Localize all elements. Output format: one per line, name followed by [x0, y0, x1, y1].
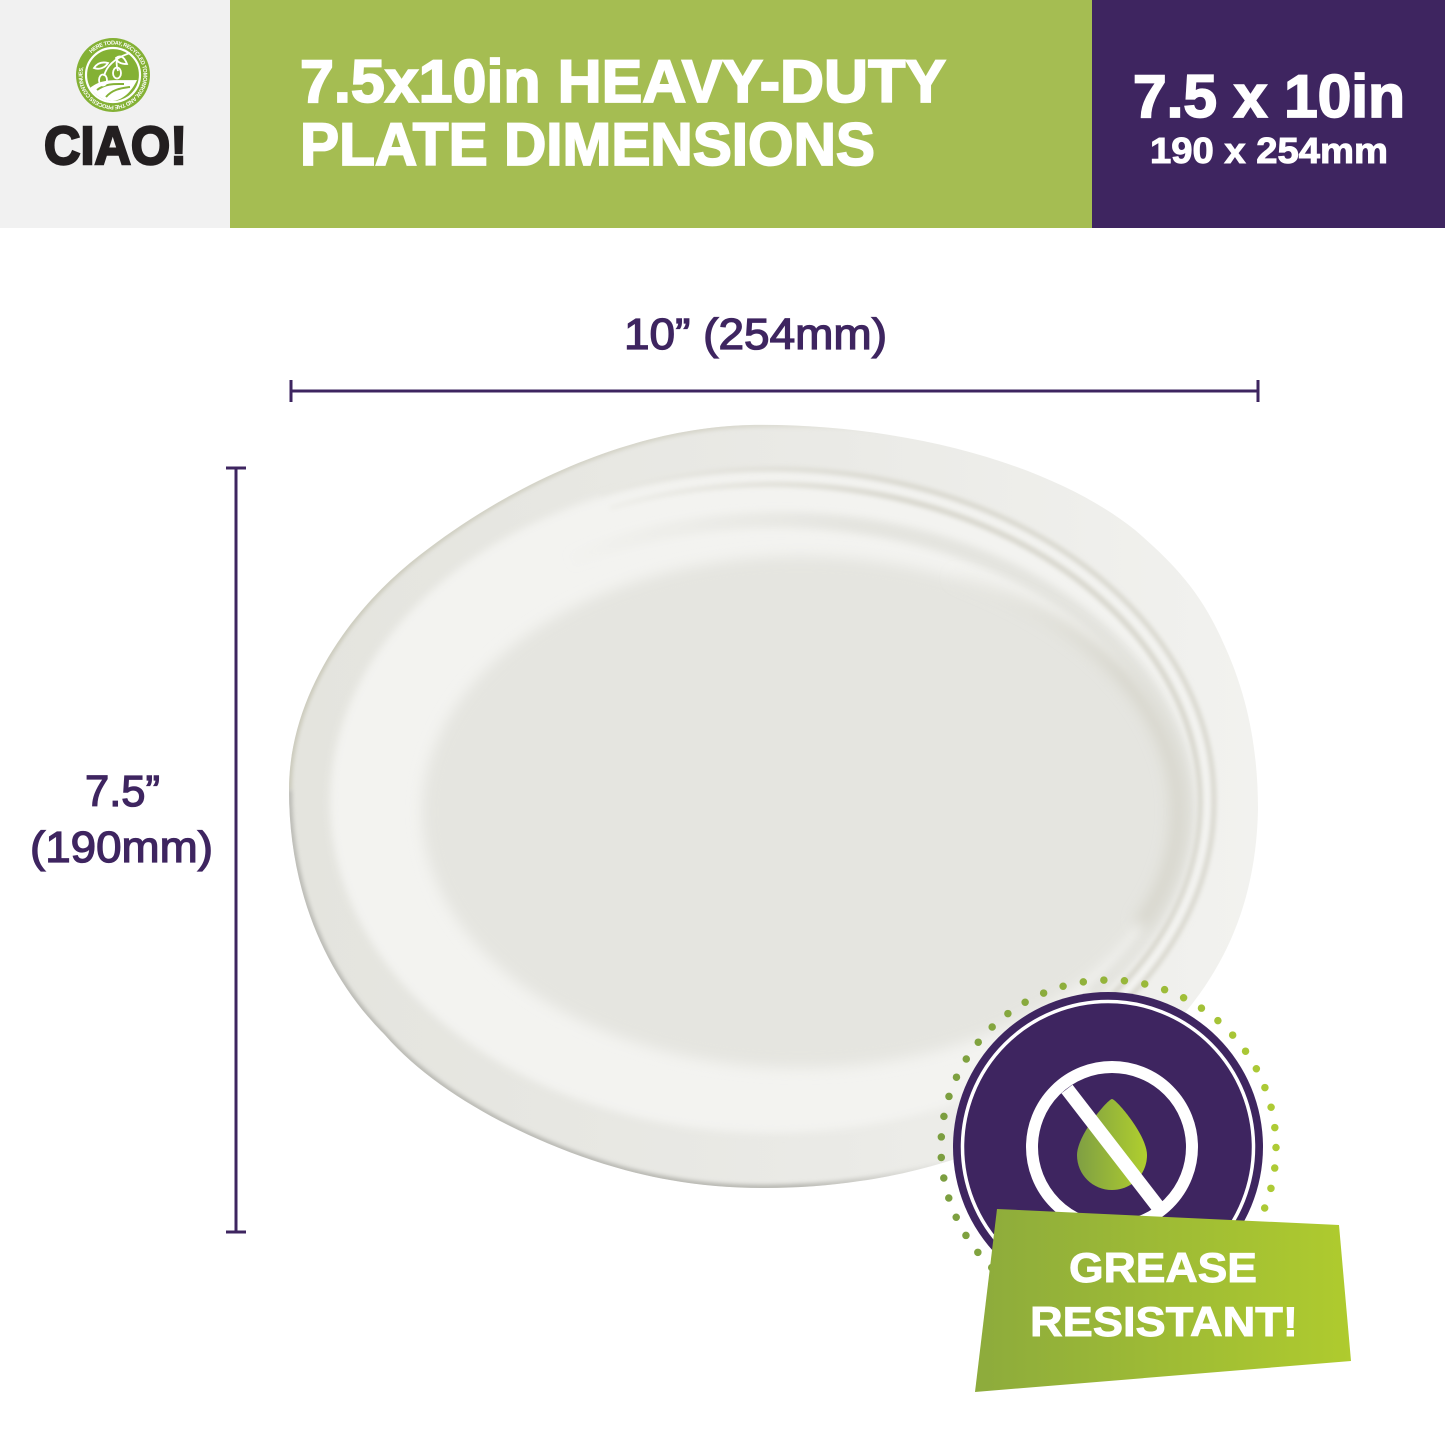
plate: [289, 425, 1258, 1188]
height label: [30, 767, 213, 872]
banner text: RESISTANT!: [1030, 1298, 1298, 1345]
logo panel: [0, 0, 230, 228]
logo badge: HERE TODAY, RECYCLED TOMORROW, AND THE PROCESS CONTINUES.: [78, 40, 148, 110]
width dimension line: [291, 380, 1258, 402]
width label: 10” (254mm): [624, 310, 887, 359]
icon: prohibition sign: [1032, 1067, 1192, 1227]
banner text: GREASE: [1069, 1244, 1257, 1291]
title: [300, 48, 946, 178]
height label: 7.5”: [85, 767, 160, 816]
banner text: [1030, 1244, 1298, 1345]
title: 7.5x10in HEAVY-DUTY: [300, 48, 946, 115]
size callout: [1133, 63, 1405, 171]
logo wordmark: CIAO!: [44, 116, 187, 176]
title: PLATE DIMENSIONS: [300, 111, 875, 178]
icon: grease drop: [1077, 1099, 1147, 1190]
raised ridge: [330, 474, 918, 1130]
size callout: 190 x 254mm: [1150, 130, 1388, 171]
height dimension line: [226, 468, 246, 1232]
logo: [44, 38, 187, 176]
grooves: [704, 466, 1218, 994]
size panel: [1092, 0, 1445, 228]
header band: [0, 0, 1445, 228]
well shadow: [1012, 596, 1187, 928]
badge disc: [953, 992, 1263, 1302]
height label: (190mm): [30, 823, 213, 872]
grease resistant badge: [941, 980, 1351, 1392]
dotted ring: [941, 980, 1276, 1315]
well: [422, 556, 1178, 1068]
banner: [975, 1209, 1351, 1392]
title panel: [230, 0, 1092, 228]
size callout: 7.5 x 10in: [1133, 63, 1405, 130]
